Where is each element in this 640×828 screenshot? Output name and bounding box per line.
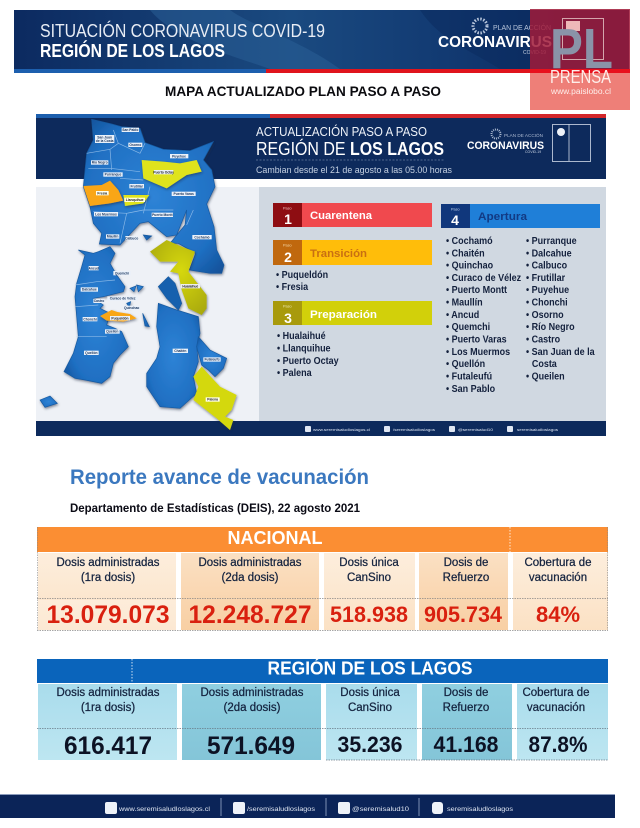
map: comuna labels: Palena xyxy=(207,398,218,402)
map: comuna labels xyxy=(81,128,221,402)
header logo: coronavirus: CORONAVIRUS xyxy=(438,34,552,51)
nacional values: 905.734 xyxy=(424,602,503,627)
nacional values: 12.248.727 xyxy=(188,601,312,629)
step 4: apertura: Apertura xyxy=(478,211,528,223)
list: apertura comunas columna 2: • Calbuco xyxy=(526,260,567,272)
nacional column labels: Dosis de xyxy=(444,557,488,569)
panel footer: redes sociales: /seremisaludloslagos xyxy=(393,428,435,432)
nacional header: NACIONAL xyxy=(228,528,322,548)
link: facebook: /seremisaludloslagos xyxy=(247,806,316,813)
list: transicion comunas xyxy=(276,270,328,293)
section title: mapa actualizado: MAPA ACTUALIZADO PLAN PASO A PASO xyxy=(165,83,441,99)
nacional column labels: (1ra dosis) xyxy=(81,572,135,584)
panel: mapa paso a paso xyxy=(36,114,606,436)
map: comuna labels: Ancud xyxy=(88,266,99,270)
logo: coronavirus and ministry xyxy=(467,124,590,162)
list: apertura comunas columna 2: • Frutillar xyxy=(526,273,565,284)
step 2: transicion: 2 xyxy=(284,249,292,265)
nacional column labels: Cobertura de xyxy=(524,557,592,569)
header title: REGIÓN DE LOS LAGOS xyxy=(40,40,225,61)
list: apertura comunas columna 1: • San Pablo xyxy=(446,384,495,395)
region values: 571.649 xyxy=(207,732,295,760)
region column labels: Dosis única xyxy=(340,687,400,699)
map: fase transicion comunas xyxy=(83,181,137,322)
nacional column labels: CanSino xyxy=(347,572,391,584)
list: apertura comunas columna 2: • Puyehue xyxy=(526,285,569,296)
region values: 41.168 xyxy=(434,732,498,757)
map: comuna labels: Osorno xyxy=(129,143,141,147)
list: apertura comunas columna 1: • Puerto Varas xyxy=(446,334,507,346)
table: nacional xyxy=(37,527,608,630)
region values: 616.417 xyxy=(64,732,152,760)
nacional column labels: (2da dosis) xyxy=(222,572,279,584)
list: transicion comunas: • Fresia xyxy=(276,282,309,293)
step 1: cuarentena xyxy=(273,203,432,227)
nacional column labels: Dosis única xyxy=(339,557,399,569)
list: apertura comunas columna 1: • Ancud xyxy=(446,310,479,321)
panel footer: redes sociales: www.seremisaludloslagos.cl xyxy=(313,428,370,432)
link: facebook xyxy=(233,802,316,814)
map: comuna labels: Chonchi xyxy=(83,317,97,321)
link: twitter xyxy=(338,802,409,814)
list: apertura comunas columna 2: • Queilen xyxy=(526,371,565,383)
map: comuna labels: Quinchao xyxy=(124,306,139,310)
logo: coronavirus and ministry: CORONAVIRUS xyxy=(467,140,544,152)
nacional values: 518.938 xyxy=(330,602,408,627)
map: comuna labels: Frutillar xyxy=(130,184,144,188)
header logo: coronavirus: COVID-19 xyxy=(523,50,546,56)
region column labels: Cobertura de xyxy=(522,687,590,699)
region column labels: Dosis de xyxy=(444,687,488,699)
panel footer: redes sociales: seremisaludloslagos xyxy=(517,428,558,432)
map: comuna labels: Quellón xyxy=(85,351,98,355)
panel heading: REGIÓN DE LOS LAGOS xyxy=(256,138,444,159)
nacional column labels: vacunación xyxy=(529,572,587,584)
map: region de los lagos xyxy=(39,119,239,430)
logo: coronavirus and ministry: COVID-19 xyxy=(525,150,541,154)
header logo: coronavirus: PLAN DE ACCIÓN xyxy=(493,23,551,32)
map: comuna labels: Fresia xyxy=(97,191,107,195)
list: preparacion comunas: • Puerto Octay xyxy=(277,356,339,367)
nacional column labels xyxy=(56,557,592,584)
subheading: fuente: Departamento de Estadísticas (DEIS), 22 agosto 2021 xyxy=(70,501,360,515)
region column labels: Refuerzo xyxy=(443,702,489,714)
map: comuna labels: Llanquihue xyxy=(126,198,144,202)
region values: 35.236 xyxy=(338,732,402,757)
map: comuna labels: Puerto Montt xyxy=(152,213,173,217)
nacional values: 13.079.073 xyxy=(46,601,170,629)
list: preparacion comunas: • Hualaihué xyxy=(277,331,326,342)
map: comuna labels: Quemchi xyxy=(115,271,129,275)
nacional column labels: Refuerzo xyxy=(443,572,489,584)
map base: blue comunas xyxy=(40,119,227,408)
step 4: apertura xyxy=(441,204,600,228)
map: comuna labels: Queilen xyxy=(106,330,118,334)
header banner xyxy=(14,10,629,73)
map: comuna labels: Dalcahue xyxy=(82,288,97,292)
region column labels xyxy=(56,687,590,714)
map: comuna labels: Puqueldón xyxy=(111,316,129,320)
list: apertura comunas columna 1: • Chaitén xyxy=(446,248,485,260)
step 1: cuarentena: Paso xyxy=(283,206,292,210)
map: comuna labels: Puerto Octay xyxy=(153,170,174,174)
list: apertura comunas columna 2: • Purranque xyxy=(526,236,577,247)
region column labels: (1ra dosis) xyxy=(81,702,135,714)
list: apertura comunas columna 2: • Chonchi xyxy=(526,297,568,309)
table: region de los lagos xyxy=(37,658,608,760)
list: apertura comunas columna 1: • Curaco de Vélez xyxy=(446,273,521,284)
list: apertura comunas columna 1: • Maullín xyxy=(446,297,483,309)
step 3: preparacion: 3 xyxy=(284,310,292,326)
step 2: transicion: Paso xyxy=(283,244,292,248)
list: apertura comunas columna 2 xyxy=(526,236,595,383)
panel heading: Cambian desde el 21 de agosto a las 05.00 horas xyxy=(256,165,452,176)
link: twitter: @seremisalud10 xyxy=(352,806,409,813)
nacional column backgrounds xyxy=(37,527,608,630)
nacional values: 84% xyxy=(536,602,580,627)
link: web: www.seremisaludloslagos.cl xyxy=(118,806,211,813)
link: web xyxy=(105,802,211,814)
list: apertura comunas columna 2: • Castro xyxy=(526,334,560,346)
region column labels: Dosis administradas xyxy=(200,687,304,699)
list: preparacion comunas: • Palena xyxy=(277,368,312,379)
step 2: transicion xyxy=(273,240,432,265)
map: comuna labels: Futaleufú xyxy=(205,358,219,362)
list: apertura comunas columna 1: • Futaleufú xyxy=(446,371,492,383)
list: transicion comunas: • Puqueldón xyxy=(276,270,328,281)
list: apertura comunas columna 2: Costa xyxy=(532,359,557,370)
panel heading: ACTUALIZACIÓN PASO A PASO xyxy=(256,124,427,139)
map: comuna labels: Río Negro xyxy=(92,161,108,165)
header logo: coronavirus xyxy=(438,19,552,56)
map: comuna labels: Chaitén xyxy=(174,349,186,353)
step 3: preparacion xyxy=(273,301,432,326)
list: apertura comunas columna 1: • Quemchi xyxy=(446,322,490,333)
list: apertura comunas columna 1: • Cochamó xyxy=(446,236,493,247)
map: comuna labels: Maullín xyxy=(107,235,118,239)
step 4: apertura: Paso xyxy=(451,208,460,212)
map: comuna labels: Castro xyxy=(94,299,104,303)
step 2: transicion: Transición xyxy=(310,248,367,260)
watermark: PL prensa: www.paislobo.cl xyxy=(550,87,611,96)
panel background xyxy=(36,114,606,436)
region header xyxy=(37,658,608,683)
map: comuna labels: de la Costa xyxy=(96,139,114,143)
region column labels: Dosis administradas xyxy=(56,687,160,699)
list: apertura comunas columna 2: • Río Negro xyxy=(526,322,575,333)
region values: 87.8% xyxy=(528,732,588,757)
list: preparacion comunas xyxy=(277,331,339,379)
map: comuna labels: Los Muermos xyxy=(95,212,117,216)
region column backgrounds xyxy=(37,684,608,760)
map: comuna labels: Curaco de Vélez xyxy=(110,297,136,301)
footer bar: redes sociales xyxy=(0,794,615,818)
step 3: preparacion: Paso xyxy=(283,304,292,308)
header title xyxy=(40,20,325,61)
heading: reporte avance de vacunacion: Reporte avance de vacunación xyxy=(70,466,369,489)
map: comuna labels: Purranque xyxy=(105,173,121,177)
watermark: PL prensa: PRENSA xyxy=(550,67,611,87)
logo: coronavirus and ministry: PLAN DE ACCIÓN xyxy=(504,132,543,138)
panel footer: redes sociales: @seremisalud10 xyxy=(458,428,493,432)
list: apertura comunas columna 2: • Osorno xyxy=(526,310,564,321)
watermark: PL prensa: PL xyxy=(550,17,613,81)
watermark: PL prensa xyxy=(530,9,630,110)
map: comuna labels: Calbuco xyxy=(125,236,138,240)
map: comuna labels: Puyehue xyxy=(172,154,186,158)
list: apertura comunas columna 1 xyxy=(446,236,521,395)
list: apertura comunas columna 1: • Quinchao xyxy=(446,260,493,272)
map: comuna labels: Hualaihué xyxy=(182,284,198,288)
region values xyxy=(64,732,588,760)
list: apertura comunas columna 1: • Los Muermos xyxy=(446,347,510,358)
region column labels: (2da dosis) xyxy=(224,702,281,714)
map: comuna boundaries xyxy=(75,130,193,337)
map: comuna labels: San Pablo xyxy=(122,128,138,132)
step 1: cuarentena: Cuarentena xyxy=(310,210,373,222)
link: instagram xyxy=(432,802,514,814)
list: apertura comunas columna 2: • Dalcahue xyxy=(526,248,572,260)
list: apertura comunas columna 1: • Puerto Montt xyxy=(446,285,508,296)
nacional header xyxy=(37,527,608,552)
nacional column labels: Dosis administradas xyxy=(56,557,160,569)
map: fase preparacion comunas xyxy=(123,160,237,430)
step 4: apertura: 4 xyxy=(451,212,459,228)
region column labels: vacunación xyxy=(527,702,585,714)
link: instagram: seremisaludloslagos xyxy=(447,806,514,813)
step 3: preparacion: Preparación xyxy=(310,309,377,321)
panel footer: redes sociales xyxy=(305,426,558,432)
map: comuna labels: San Juan xyxy=(97,135,112,139)
panel heading xyxy=(256,124,452,176)
list: apertura comunas columna 1: • Quellón xyxy=(446,359,485,370)
header title: SITUACIÓN CORONAVIRUS COVID-19 xyxy=(40,20,325,41)
map: comuna labels: Puerto Varas xyxy=(173,192,194,196)
nacional values xyxy=(46,601,580,629)
step 1: cuarentena: 1 xyxy=(284,211,292,227)
list: preparacion comunas: • Llanquihue xyxy=(277,343,331,355)
region header: REGIÓN DE LOS LAGOS xyxy=(268,658,472,678)
map: comuna labels: Cochamó xyxy=(194,235,210,239)
nacional column labels: Dosis administradas xyxy=(198,557,302,569)
region column labels: CanSino xyxy=(348,702,392,714)
list: apertura comunas columna 2: • San Juan de la xyxy=(526,347,595,358)
